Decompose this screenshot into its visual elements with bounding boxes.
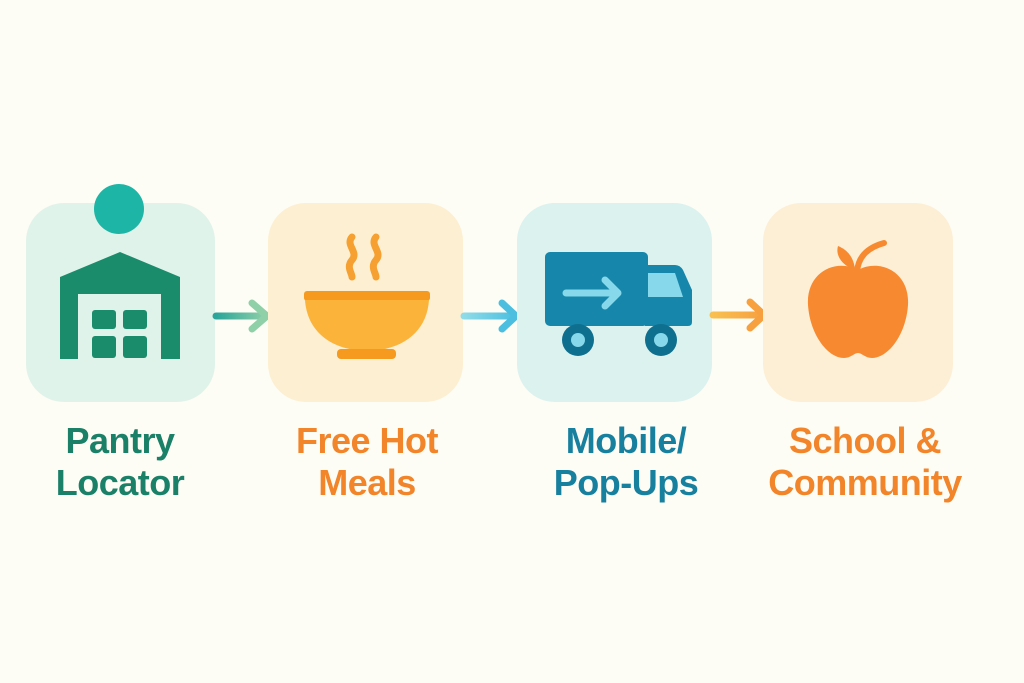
label: school & community: [768, 420, 962, 503]
label: school & community: Community: [768, 462, 962, 503]
label: pantry locator: Pantry: [65, 420, 175, 461]
icon: location dot: [94, 184, 144, 234]
arrow 2: [464, 303, 516, 329]
icon: truck: [545, 252, 692, 356]
label: pantry locator: [56, 420, 184, 503]
label: school & community: School &: [789, 420, 941, 461]
arrow 1: [216, 303, 267, 329]
panel: free hot meals: [268, 203, 463, 402]
panel: school & community: [763, 203, 953, 402]
label: mobile pop-ups: [554, 420, 698, 503]
label: mobile pop-ups: Pop-Ups: [554, 462, 698, 503]
icon: steam: [349, 237, 378, 277]
label: free hot meals: Free Hot: [296, 420, 438, 461]
label: free hot meals: Meals: [318, 462, 416, 503]
icon: apple: [808, 243, 908, 358]
icon: warehouse: [60, 252, 180, 359]
panel: pantry locator: [26, 184, 215, 402]
icon: bowl: [304, 291, 430, 301]
label: free hot meals: [296, 420, 438, 503]
arrow 3: [713, 302, 764, 328]
panel: mobile pop-ups: [517, 203, 712, 402]
label: pantry locator: Locator: [56, 462, 184, 503]
label: mobile pop-ups: Mobile/: [566, 420, 686, 461]
